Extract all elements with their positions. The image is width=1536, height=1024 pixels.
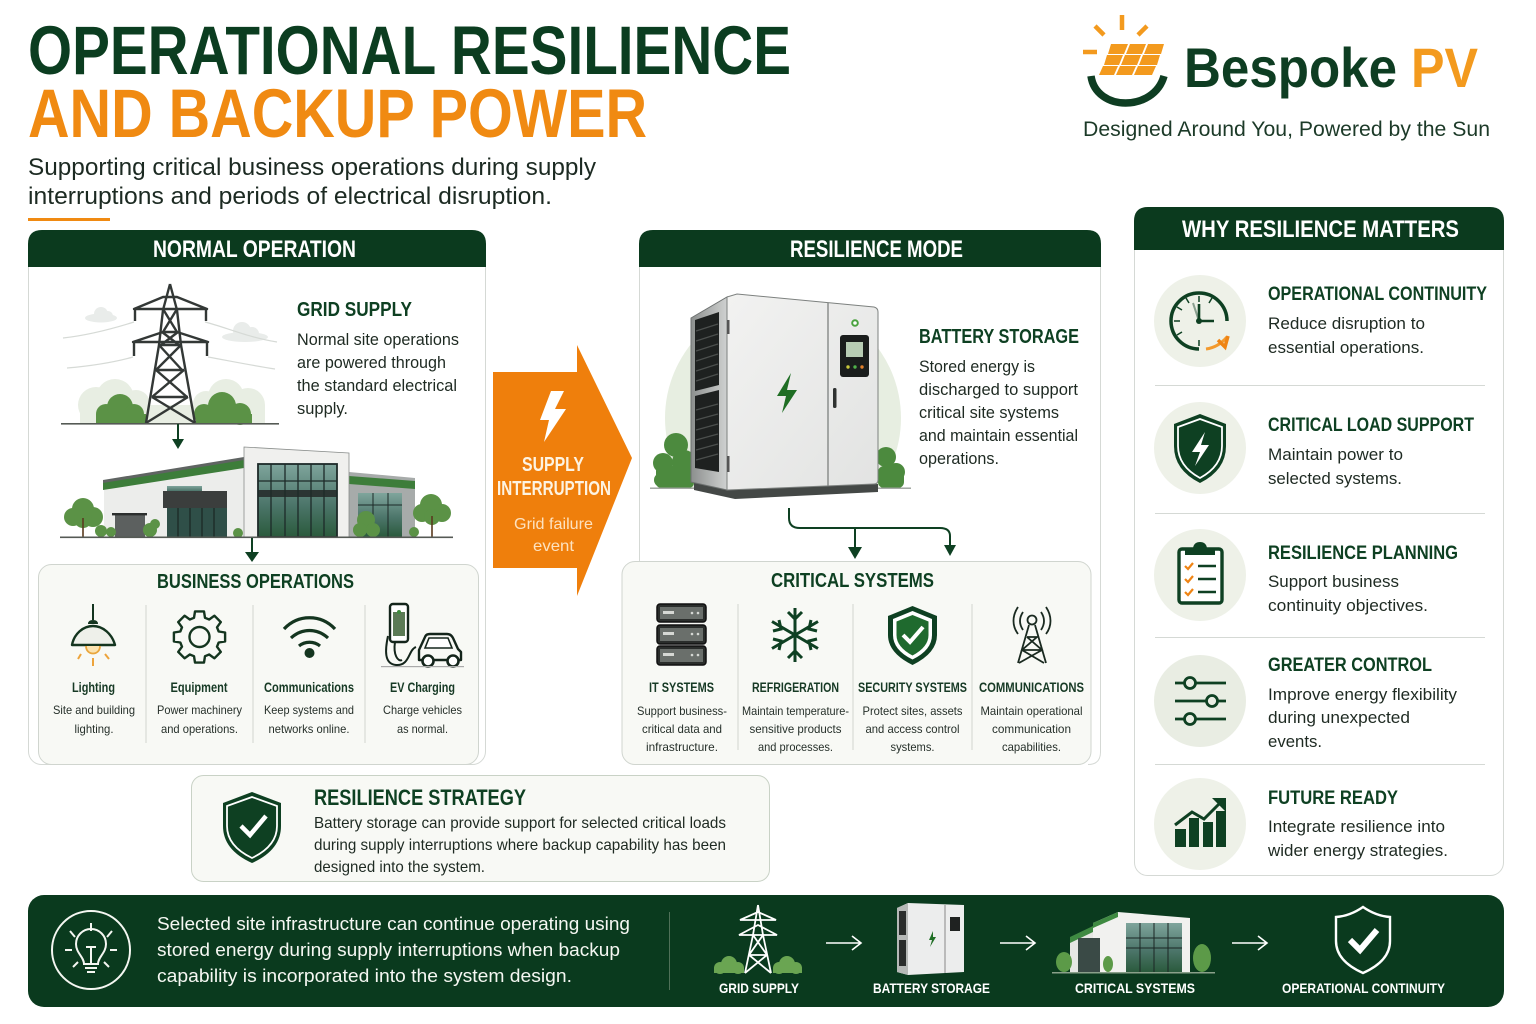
item: critical load support: selected systems. bbox=[1268, 470, 1402, 488]
connector: battery to critical systems bbox=[789, 508, 956, 559]
header: resilience mode: RESILIENCE MODE bbox=[790, 236, 963, 263]
title bbox=[28, 12, 791, 152]
text: grid supply: are powered through bbox=[297, 354, 446, 372]
panel: normal operation bbox=[28, 230, 486, 764]
arrow: supply interruption: Grid failure bbox=[514, 516, 593, 533]
item: refrigeration: and processes. bbox=[758, 740, 833, 754]
item: future ready: wider energy strategies. bbox=[1267, 842, 1448, 860]
item: communications systems bbox=[979, 607, 1084, 754]
text: battery storage: Stored energy is bbox=[919, 358, 1035, 376]
item: greater control: events. bbox=[1268, 733, 1322, 751]
title: AND BACKUP POWER bbox=[28, 75, 647, 152]
subtitle: interruptions and periods of electrical disruption. bbox=[28, 183, 552, 210]
item: communications bbox=[264, 618, 354, 736]
subtitle bbox=[28, 154, 596, 221]
text: grid supply: GRID SUPPLY bbox=[297, 299, 413, 321]
item: future ready: FUTURE READY bbox=[1268, 788, 1398, 809]
text: battery storage: BATTERY STORAGE bbox=[919, 326, 1079, 348]
text: resilience strategy: designed into the system. bbox=[314, 859, 485, 876]
subtitle: Supporting critical business operations during supply bbox=[28, 154, 596, 181]
item: EV charging: EV Charging bbox=[390, 680, 455, 695]
item: security systems: systems. bbox=[890, 740, 934, 754]
text: summary: stored energy during supply interruptions when backup bbox=[157, 939, 620, 960]
item: refrigeration: REFRIGERATION bbox=[752, 680, 839, 695]
header: resilience mode bbox=[639, 230, 1101, 267]
heading: business operations: BUSINESS OPERATIONS bbox=[157, 570, 354, 593]
item: equipment: and operations. bbox=[161, 722, 238, 736]
text: resilience strategy: during supply interruptions where backup capability has been bbox=[314, 837, 726, 854]
item: greater control: GREATER CONTROL bbox=[1268, 655, 1432, 676]
arrow: supply interruption: INTERRUPTION bbox=[497, 478, 611, 500]
arrow: flow 1 bbox=[826, 936, 861, 950]
item: greater control bbox=[1154, 655, 1458, 751]
arrow: supply interruption: event bbox=[533, 538, 575, 555]
banner: summary bbox=[28, 895, 1504, 1007]
arrow: building to operations bbox=[245, 538, 259, 562]
item: security systems bbox=[858, 606, 967, 754]
item: IT systems: IT SYSTEMS bbox=[649, 680, 714, 695]
text: battery storage: and maintain essential bbox=[919, 427, 1078, 445]
item: equipment: Power machinery bbox=[157, 703, 242, 717]
item: critical load support: Maintain power to bbox=[1268, 446, 1403, 464]
logo: Bespoke PV bbox=[1083, 15, 1490, 141]
flow: operational continuity: OPERATIONAL CONTINUITY bbox=[1282, 980, 1446, 996]
logo: Bespoke PV: Designed Around You, Powered by the Sun bbox=[1083, 118, 1490, 141]
item: communications: networks online. bbox=[268, 722, 350, 736]
text: battery storage bbox=[919, 326, 1079, 468]
flow: battery storage: BATTERY STORAGE bbox=[873, 980, 990, 996]
item: future ready: Integrate resilience into bbox=[1268, 818, 1445, 836]
item: security systems: and access control bbox=[866, 722, 960, 736]
header: why resilience matters: WHY RESILIENCE MATTERS bbox=[1182, 216, 1459, 243]
item: operational continuity: essential operations. bbox=[1268, 339, 1424, 357]
text: resilience strategy bbox=[314, 785, 726, 876]
header: normal operation bbox=[28, 230, 486, 267]
illustration: commercial building bbox=[60, 447, 453, 538]
item: IT systems: critical data and bbox=[642, 722, 722, 736]
text: resilience strategy: RESILIENCE STRATEGY bbox=[314, 785, 526, 810]
item: lighting bbox=[53, 604, 135, 736]
item: IT systems: infrastructure. bbox=[646, 740, 718, 754]
arrow: flow 3 bbox=[1232, 936, 1267, 950]
illustration: battery cabinet bbox=[641, 294, 921, 539]
header: normal operation: NORMAL OPERATION bbox=[153, 236, 356, 263]
icon: shield check bbox=[223, 792, 281, 863]
item: EV charging: as normal. bbox=[397, 722, 448, 736]
text: summary: capability is incorporated into the system design. bbox=[157, 965, 572, 986]
text: summary: Selected site infrastructure can continue operating using bbox=[157, 913, 630, 934]
item: future ready bbox=[1154, 778, 1448, 870]
item: communications: Communications bbox=[264, 680, 354, 695]
item: resilience planning bbox=[1154, 529, 1458, 621]
arrow: tower to building bbox=[172, 424, 184, 449]
item: operational continuity: OPERATIONAL CONTINUITY bbox=[1268, 284, 1487, 305]
flow: battery storage bbox=[873, 903, 990, 996]
panel: why resilience matters bbox=[1134, 207, 1504, 876]
arrow: supply interruption bbox=[493, 345, 632, 596]
item: lighting: lighting. bbox=[74, 722, 114, 736]
flow: critical systems: CRITICAL SYSTEMS bbox=[1075, 980, 1195, 996]
item: resilience planning: RESILIENCE PLANNING bbox=[1268, 543, 1458, 564]
flow: critical systems bbox=[1052, 912, 1215, 996]
heading: critical systems: CRITICAL SYSTEMS bbox=[771, 569, 934, 592]
panel: critical systems bbox=[622, 562, 1091, 764]
item: equipment: Equipment bbox=[170, 680, 228, 695]
item: refrigeration: Maintain temperature- bbox=[742, 704, 849, 718]
item: EV charging bbox=[381, 604, 464, 736]
text: battery storage: critical site systems bbox=[919, 404, 1059, 422]
item: operational continuity: Reduce disruption to bbox=[1268, 315, 1425, 333]
icon: lightbulb bbox=[52, 911, 130, 989]
item: resilience planning: continuity objectives. bbox=[1268, 597, 1428, 615]
item: communications systems: Maintain operational bbox=[980, 704, 1082, 718]
logo: Bespoke PV: Bespoke bbox=[1184, 36, 1397, 99]
item: critical load support bbox=[1154, 402, 1474, 494]
arrow: flow 2 bbox=[1000, 936, 1035, 950]
item: communications: Keep systems and bbox=[264, 703, 354, 717]
item: lighting: Site and building bbox=[53, 703, 135, 717]
panel: business operations bbox=[38, 564, 478, 764]
item: communications systems: communication bbox=[992, 722, 1071, 736]
illustration: transmission tower bbox=[61, 284, 279, 425]
text: grid supply bbox=[297, 299, 459, 418]
item: EV charging: Charge vehicles bbox=[383, 703, 462, 717]
text: grid supply: the standard electrical bbox=[297, 377, 457, 395]
flow: grid supply bbox=[714, 905, 802, 996]
header: why resilience matters bbox=[1134, 207, 1504, 250]
item: security systems: Protect sites, assets bbox=[862, 704, 962, 718]
item: communications systems: COMMUNICATIONS bbox=[979, 680, 1084, 695]
arrow: supply interruption: SUPPLY bbox=[522, 454, 585, 476]
text: summary bbox=[157, 913, 630, 986]
logo: Bespoke PV: PV bbox=[1411, 36, 1478, 99]
item: resilience planning: Support business bbox=[1268, 573, 1399, 591]
flow: operational continuity bbox=[1282, 907, 1446, 996]
item: communications systems: capabilities. bbox=[1002, 740, 1061, 754]
text: battery storage: discharged to support bbox=[919, 381, 1078, 399]
item: refrigeration: sensitive products bbox=[750, 722, 842, 736]
item: security systems: SECURITY SYSTEMS bbox=[858, 680, 967, 695]
item: operational continuity bbox=[1154, 275, 1487, 367]
item: IT systems bbox=[637, 604, 727, 754]
item: IT systems: Support business- bbox=[637, 704, 727, 718]
text: battery storage: operations. bbox=[919, 450, 999, 468]
item: refrigeration bbox=[742, 608, 849, 754]
callout: resilience strategy bbox=[192, 776, 770, 882]
item: critical load support: CRITICAL LOAD SUPPORT bbox=[1268, 415, 1474, 436]
panel: resilience mode bbox=[622, 230, 1101, 764]
item: greater control: during unexpected bbox=[1268, 709, 1410, 727]
item: lighting: Lighting bbox=[72, 680, 115, 695]
title: OPERATIONAL RESILIENCE bbox=[28, 12, 791, 89]
item: equipment bbox=[157, 611, 242, 736]
flow: grid supply: GRID SUPPLY bbox=[719, 980, 800, 996]
item: greater control: Improve energy flexibility bbox=[1268, 686, 1458, 704]
text: grid supply: Normal site operations bbox=[297, 331, 459, 349]
text: resilience strategy: Battery storage can provide support for selected critical loads bbox=[314, 815, 726, 832]
text: grid supply: supply. bbox=[297, 400, 348, 418]
